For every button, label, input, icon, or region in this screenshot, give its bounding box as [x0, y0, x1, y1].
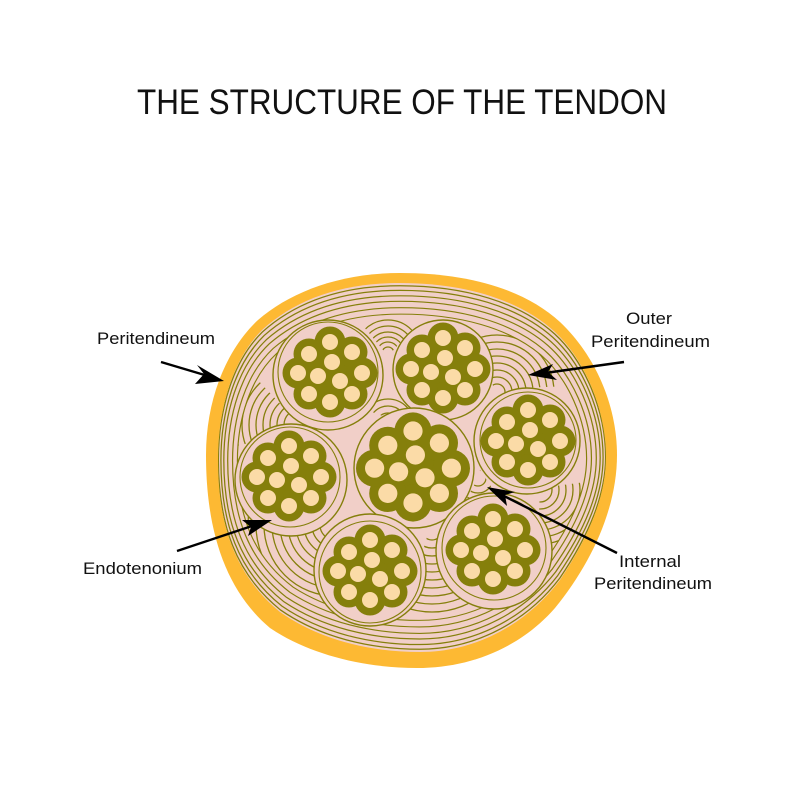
title: THE STRUCTURE OF THE TENDON — [137, 83, 667, 122]
bundle: lower right — [436, 493, 552, 609]
bundle: upper left — [273, 320, 383, 430]
label: Internal Peritendineum: Internal — [619, 552, 681, 571]
label: Outer Peritendineum: Peritendineum — [591, 332, 710, 351]
arrow: Internal Peritendineum — [487, 487, 617, 553]
label: Endotenonium: Endotenonium — [83, 559, 202, 578]
label: Internal Peritendineum: Peritendineum — [594, 574, 712, 593]
label: Peritendineum: Peritendineum — [97, 329, 215, 348]
bundle: bottom middle — [314, 514, 426, 626]
label: Outer Peritendineum: Outer — [626, 309, 672, 328]
bundle: centre large — [354, 408, 474, 528]
arrow: Peritendineum — [161, 362, 224, 384]
pink tissue body — [218, 283, 606, 652]
bundle: upper middle — [393, 320, 493, 420]
fibre arcs between bundles — [235, 320, 601, 620]
label: Internal Peritendineum — [594, 552, 712, 593]
tendon cross-section — [206, 273, 617, 668]
arrow: Outer Peritendineum — [528, 362, 624, 380]
label: Outer Peritendineum — [591, 309, 710, 351]
concentric outer fibre lines — [218, 286, 606, 649]
bundle: left — [235, 424, 347, 536]
outer sheath: yellow — [206, 273, 617, 668]
bundle: right — [474, 388, 580, 494]
arrow: Endotenonium — [177, 520, 272, 551]
